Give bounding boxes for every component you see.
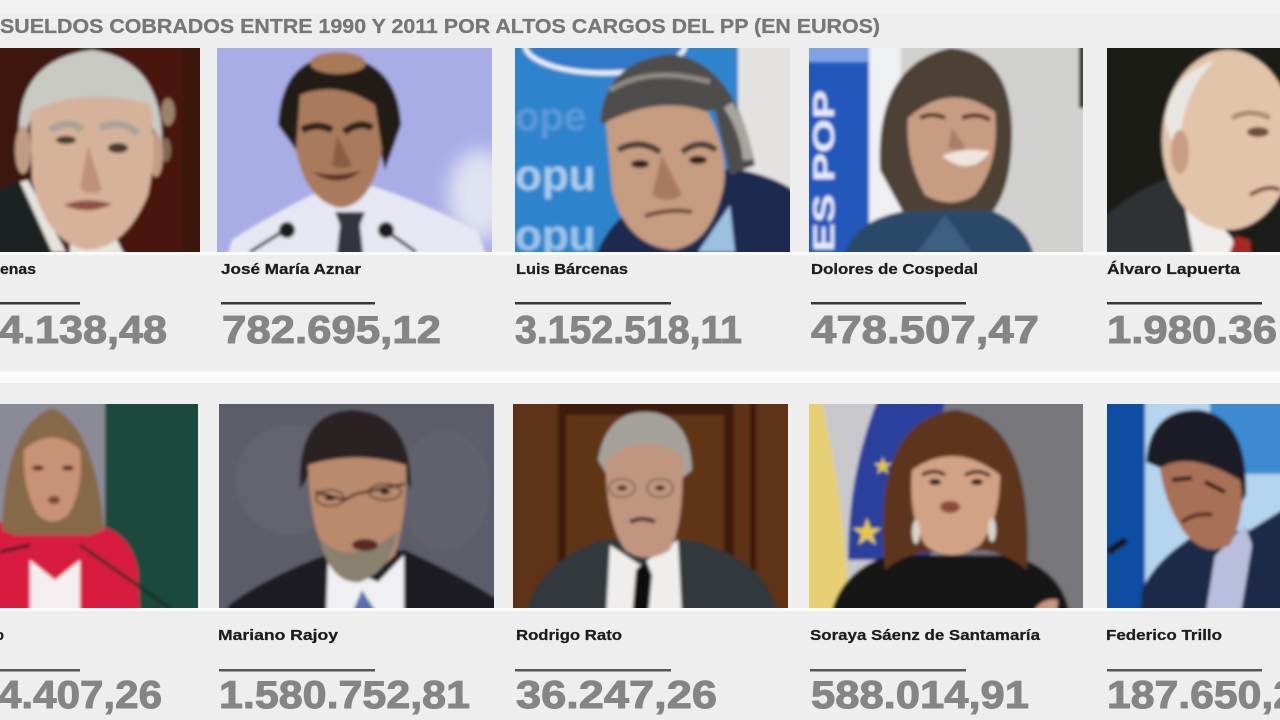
- name: Luis Bárcenas: [516, 261, 628, 278]
- amount: 478.507,47: [811, 309, 1039, 352]
- name: Mariano Rajoy: [218, 627, 339, 644]
- portrait: man in white shirt with microphones on lavender background: [217, 48, 492, 252]
- amount: 36.247,26: [516, 674, 717, 717]
- amount: 3.152.518,11: [515, 309, 742, 352]
- portrait: woman with shoulder-length hair and earrings before Spanish and EU flags: ★: [872, 452, 894, 480]
- portrait: woman with shoulder-length hair and earrings before Spanish and EU flags: ★: [850, 510, 884, 554]
- amount: 4.138,48: [0, 309, 167, 352]
- panel: first person, row one: [0, 38, 210, 352]
- name: Soraya Sáenz de Santamaría: [810, 627, 1041, 644]
- name: Dolores de Cospedal: [811, 261, 978, 278]
- portrait: man with swept-back grey hair and navy jacket before a blue party backdrop: [515, 48, 790, 252]
- portrait: bearded man with glasses in dark suit, grey background: [219, 404, 494, 608]
- panel: José María Aznar: [217, 48, 492, 350]
- portrait: smiling woman with long brown hair before a blue party banner: ES POP: [808, 90, 841, 252]
- portrait: white-haired man against a dark red door: [0, 48, 200, 252]
- portrait: man with swept-back grey hair and navy jacket before a blue party backdrop: opu: [515, 211, 596, 260]
- amount: 782.695,12: [222, 309, 441, 352]
- name: José María Aznar: [221, 261, 361, 278]
- amount: 588.014,91: [811, 674, 1029, 717]
- portrait: smiling woman with long brown hair before a blue party banner: [809, 48, 1083, 252]
- panel: Federico Trillo: [1097, 394, 1280, 717]
- portrait: woman with shoulder-length hair and earrings before Spanish and EU flags: [809, 404, 1083, 608]
- portrait: bald elderly man in dark suit and red tie: [1107, 48, 1280, 252]
- portrait: woman in red jacket at a podium, green backdrop: [0, 404, 198, 608]
- panel: Álvaro Lapuerta: [1107, 48, 1280, 344]
- amount: 187.650,2: [1107, 674, 1280, 717]
- panel: Mariano Rajoy: [219, 404, 494, 714]
- name: Álvaro Lapuerta: [1107, 261, 1241, 278]
- panel: Soraya Sáenz de Santamaría: [809, 404, 1083, 714]
- panel: first person, row two: [0, 394, 208, 717]
- amount: 1.580.752,81: [219, 674, 470, 717]
- panel: Luis Bárcenas: [515, 48, 790, 350]
- title: SUELDOS COBRADOS ENTRE 1990 Y 2011 POR ALTOS CARGOS DEL PP (EN EUROS): [0, 16, 880, 38]
- name: enas: [0, 261, 36, 278]
- name: Rodrigo Rato: [516, 627, 622, 644]
- portrait: dark-haired man in navy suit with lilac tie before a blue backdrop: [1107, 404, 1280, 608]
- amount: 4.407,26: [0, 674, 162, 717]
- portrait: man with swept-back grey hair and navy jacket before a blue party backdrop: opu: [515, 151, 596, 200]
- panel: Rodrigo Rato: [513, 404, 788, 714]
- portrait: grey-haired man in dark suit before a wooden door: [513, 404, 788, 608]
- portrait: man with swept-back grey hair and navy jacket before a blue party backdrop: ope: [515, 95, 586, 139]
- amount: 1.980.36: [1107, 309, 1277, 352]
- name: Federico Trillo: [1106, 627, 1222, 644]
- panel: Dolores de Cospedal: [809, 48, 1083, 350]
